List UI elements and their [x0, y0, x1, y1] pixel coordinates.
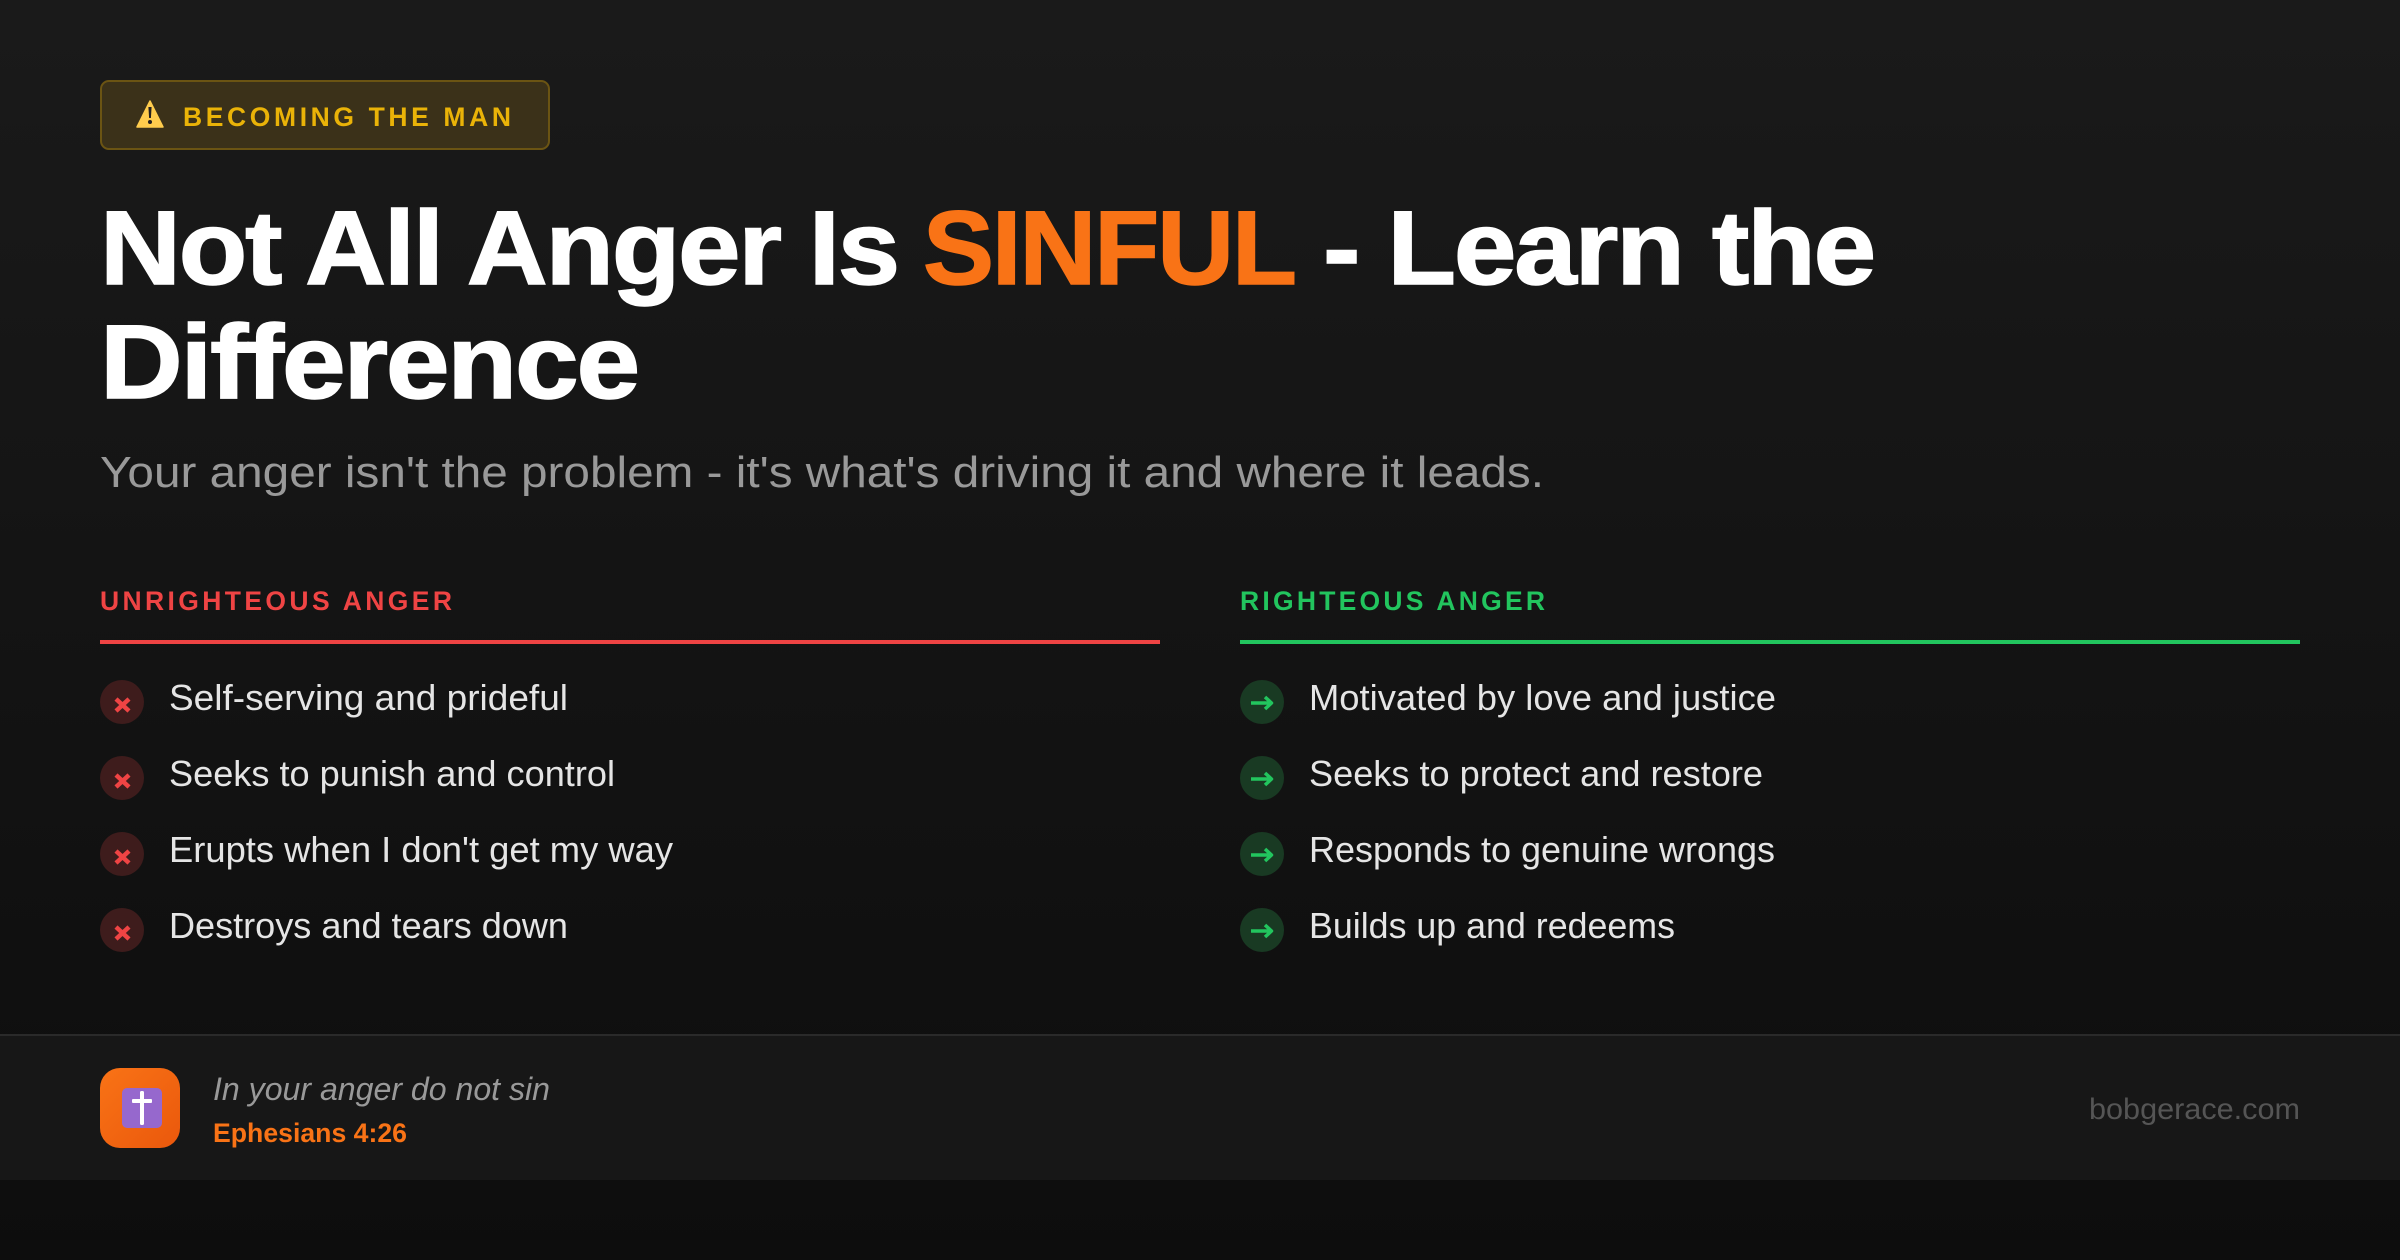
title: Not All Anger Is: [100, 190, 898, 307]
panel: unrighteous anger: [100, 586, 1160, 952]
icon: cross: [100, 1068, 180, 1148]
website: bobgerace.com: [2089, 1093, 2300, 1126]
title: [100, 190, 1874, 421]
item: responds: Responds to genuine wrongs: [1309, 829, 1775, 870]
title: Difference: [100, 304, 638, 421]
item: self-serving: Self-serving and prideful: [169, 677, 568, 718]
heading: righteous anger: RIGHTEOUS ANGER: [1240, 586, 1545, 616]
heading: unrighteous anger: UNRIGHTEOUS ANGER: [100, 586, 452, 616]
panel: righteous anger: [1240, 586, 2300, 952]
item: motivated: Motivated by love and justice: [1309, 677, 1776, 718]
item: protect: Seeks to protect and restore: [1309, 753, 1763, 794]
scripture reference: Ephesians 4:26: [213, 1118, 407, 1148]
scripture quote: In your anger do not sin: [213, 1071, 550, 1107]
subtitle: Your anger isn't the problem - it's what's driving it and where it leads.: [100, 448, 1544, 497]
footer: [0, 1034, 2400, 1180]
badge: becoming the man: [101, 81, 549, 149]
title emphasis: SINFUL: SINFUL: [923, 190, 1295, 307]
title: - Learn the: [1323, 190, 1874, 307]
badge label: BECOMING THE MAN: [183, 102, 511, 132]
item: seeks to punish: Seeks to punish and control: [169, 753, 615, 794]
item: erupts: Erupts when I don't get my way: [169, 829, 674, 870]
item: builds: Builds up and redeems: [1309, 905, 1675, 946]
item: destroys: Destroys and tears down: [169, 905, 568, 946]
icon: warning triangle: [137, 101, 163, 127]
